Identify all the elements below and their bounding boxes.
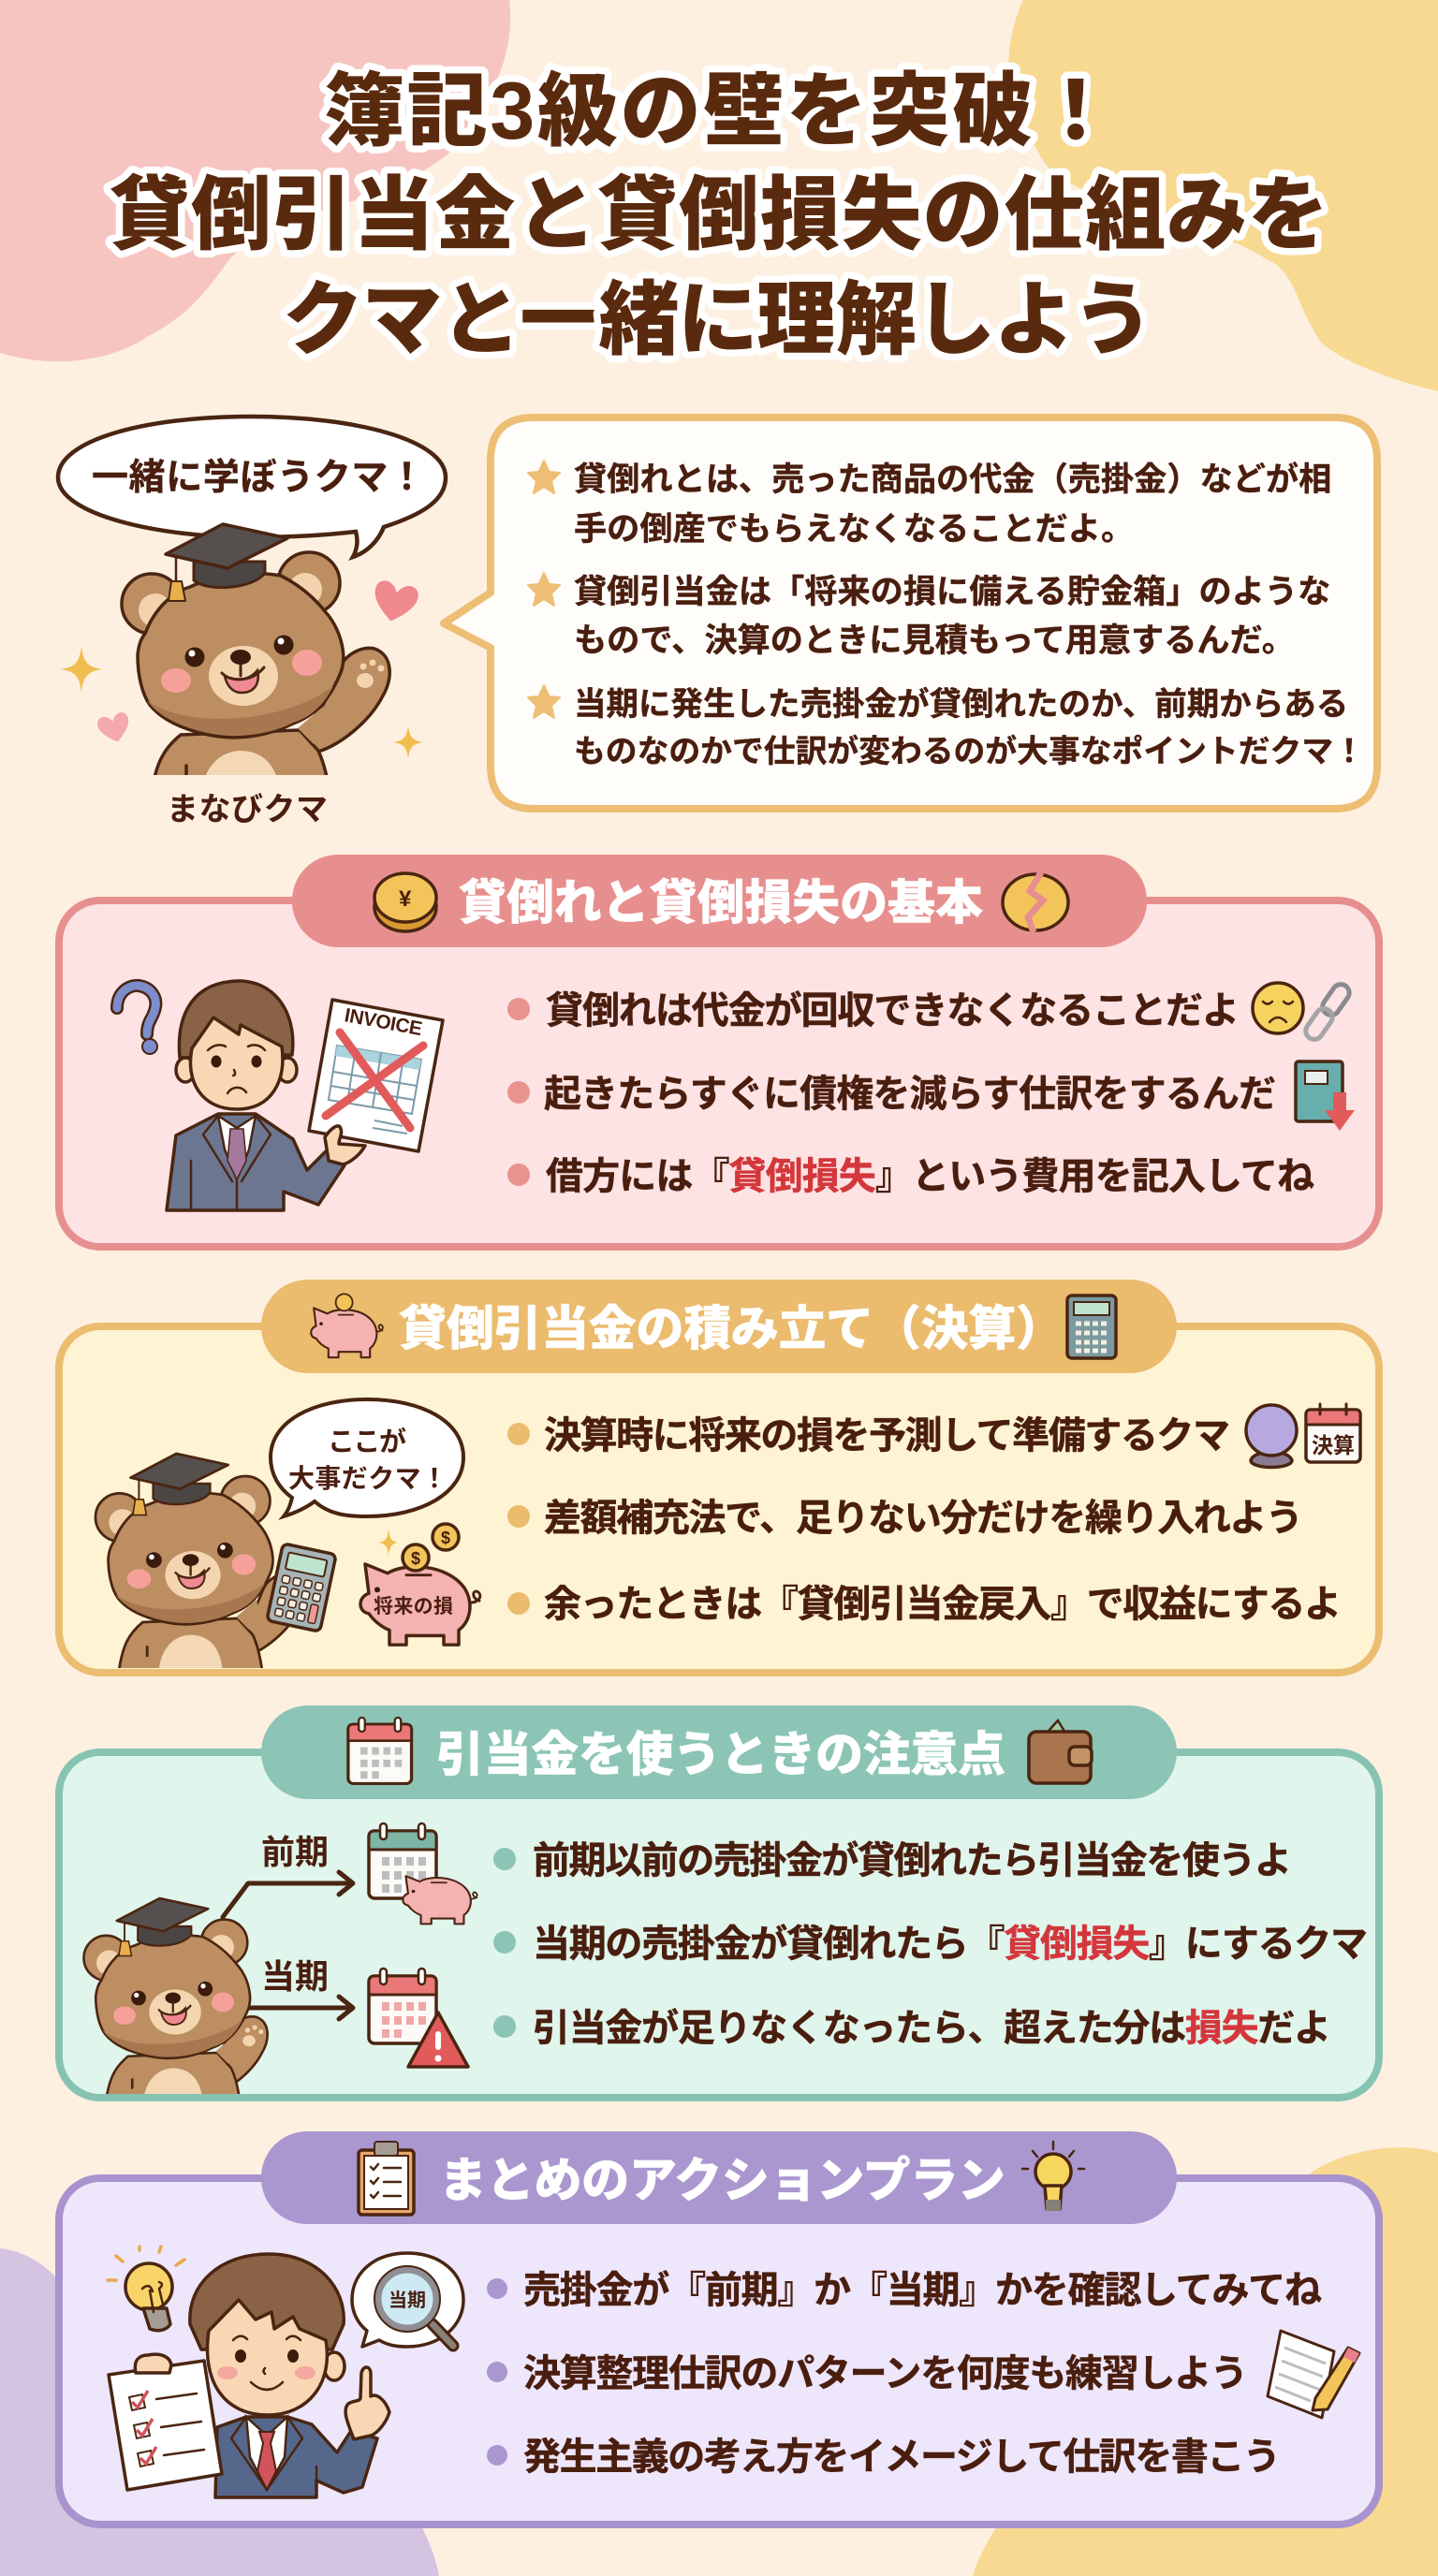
- speech bubble: ここが大事だクマ: [271, 1399, 463, 1516]
- icon: broken chain: [1302, 981, 1353, 1043]
- text: intro 1: 手の倒産でもらえなくなることだよ。: [574, 511, 1134, 548]
- hearts and sparkles: [60, 579, 424, 759]
- mascot name: まなびクマ: [167, 792, 328, 827]
- icon: 決算 calendar: 決算: [1312, 1433, 1355, 1457]
- bear: [95, 1454, 303, 1678]
- header pill: [261, 2131, 1177, 2224]
- man with invoice: [117, 981, 443, 1210]
- icon: ledger with down arrow: [1296, 1061, 1355, 1131]
- checklist: [109, 2354, 222, 2490]
- heading: まとめのアクションプラン: [439, 2154, 1005, 2207]
- label: 前期: 前期: [261, 1833, 329, 1871]
- icon: sad face: [1253, 983, 1303, 1033]
- bullet points: [493, 1840, 1368, 2049]
- bullet points: 決算時に将来の損を予測して準備するクマ: [544, 1415, 1230, 1456]
- speech bubble: 一緒に学ぼうクマ！: [92, 458, 425, 498]
- hand pointing: [345, 2367, 389, 2439]
- bullet points: 当期の売掛金が貸倒れたら『貸倒損失』にするクマ: [533, 1924, 1368, 1965]
- bullet points: 前期以前の売掛金が貸倒れたら引当金を使うよ: [533, 1840, 1292, 1881]
- piggy bank: 将来の損: [360, 1524, 480, 1645]
- text: intro 2: 貸倒引当金は「将来の損に備える貯金箱」のような: [574, 574, 1330, 610]
- title: [110, 66, 1328, 365]
- bullet points: 差額補充法で、足りない分だけを繰り入れよう: [544, 1498, 1303, 1539]
- icon: broken coin: [1003, 872, 1068, 932]
- icon: notebook and pencil: [1268, 2331, 1359, 2418]
- piggy bank: 将来の損: 将来の損: [374, 1596, 453, 1617]
- bullet points: 引当金が足りなくなったら、超えた分は損失だよ: [533, 2008, 1331, 2049]
- bear: [122, 524, 389, 805]
- suit: [215, 2417, 377, 2497]
- panel: intro speech bubble: [444, 417, 1377, 809]
- background blob: yellow top: [1008, 0, 1438, 391]
- magnifier bubble: [352, 2253, 463, 2347]
- icon: bulb with rays: [108, 2247, 184, 2331]
- text: intro 3: 当期に発生した売掛金が貸倒れたのか、前期からある: [574, 686, 1348, 723]
- panel: 引当金を使うときの注意点: [59, 1705, 1379, 2109]
- icon: piggy bank: [311, 1294, 383, 1357]
- background blob: purple bottom: [0, 2248, 439, 2576]
- star bullet 3: [528, 685, 560, 718]
- icon: wallet: [1029, 1720, 1092, 1783]
- speech bubble: [58, 417, 446, 557]
- bullet points: [487, 2270, 1322, 2478]
- speech bubble: ここが大事だクマ: 大事だクマ！: [288, 1464, 448, 1493]
- hand: [325, 1126, 365, 1164]
- header pill: [261, 1280, 1177, 1373]
- speech bubble: ここが大事だクマ: ここが: [328, 1426, 406, 1457]
- panel: 貸倒れと貸倒損失の基本: [59, 855, 1379, 1247]
- head: [324, 2352, 345, 2380]
- bullet points: 借方には『貸倒損失』という費用を記入してね: [546, 1156, 1314, 1197]
- invoice sheet: [309, 1000, 443, 1151]
- background blob: pink: [0, 0, 510, 361]
- magnifier bubble: 当期: [389, 2290, 426, 2311]
- icon: calendar with warning: [369, 1969, 468, 2067]
- text: intro 3: ものなのかで仕訳が変わるのが大事なポイントだクマ！: [574, 733, 1365, 769]
- star bullet 1: [528, 461, 560, 493]
- bear: [84, 1898, 268, 2109]
- suit: [167, 1114, 345, 1210]
- icon: crystal ball: [1246, 1405, 1297, 1468]
- piggy bank: 将来の損: $: [441, 1529, 450, 1547]
- bullet points: [507, 990, 1314, 1197]
- panel: まとめのアクションプラン: [59, 2131, 1379, 2525]
- bullet points: 起きたらすぐに債権を減らす仕訳をするんだ: [544, 1074, 1276, 1115]
- heading: 貸倒引当金の積み立て（決算）: [399, 1302, 1064, 1355]
- title: 簿記3級の壁を突破！: [324, 66, 1116, 156]
- star bullet 2: [528, 573, 560, 606]
- invoice sheet: INVOICE: [343, 1004, 424, 1040]
- bullet points: 決算整理仕訳のパターンを何度も練習しよう: [523, 2353, 1248, 2394]
- bullet points: 貸倒れは代金が回収できなくなることだよ: [546, 990, 1240, 1032]
- piggy bank: 将来の損: $: [411, 1549, 420, 1568]
- background blob: yellow bottom: [973, 2147, 1438, 2576]
- icon: light bulb: [1022, 2142, 1084, 2211]
- text: intro 2: もので、決算のときに見積もって用意するんだ。: [574, 622, 1295, 659]
- bullet points: 発生主義の考え方をイメージして仕訳を書こう: [523, 2437, 1281, 2478]
- icon: clipboard: [359, 2142, 414, 2215]
- icon: yen coin: [374, 873, 436, 931]
- panel: 貸倒引当金の積み立て（決算）: [59, 1280, 1379, 1678]
- title: 貸倒引当金と貸倒損失の仕組みを: [110, 170, 1328, 260]
- question mark: [117, 986, 157, 1054]
- heading: 貸倒れと貸倒損失の基本: [459, 876, 983, 929]
- mascot: まなびクマ with speech bubble: [58, 417, 446, 827]
- icon: calculator: [1067, 1295, 1116, 1358]
- icon: calendar with piggy: [369, 1823, 477, 1924]
- bullet points: 余ったときは『貸倒引当金戻入』で収益にするよ: [544, 1584, 1342, 1625]
- arrow: 前期: [223, 1872, 353, 1917]
- head: [179, 981, 293, 1058]
- icon: 決算 calendar: [1306, 1404, 1360, 1462]
- icon: calendar: [348, 1718, 412, 1783]
- icon: yen coin: ¥: [399, 886, 412, 912]
- bullet points: [507, 1415, 1342, 1625]
- bullet points: 売掛金が『前期』か『当期』かを確認してみてね: [523, 2270, 1322, 2311]
- icon: calculator held by bear: [267, 1544, 336, 1632]
- title: クマと一緒に理解しよう: [283, 275, 1153, 365]
- label: 当期: 当期: [261, 1957, 329, 1996]
- header pill: [292, 855, 1147, 947]
- header pill: [261, 1705, 1177, 1799]
- man with checklist: [108, 2247, 463, 2497]
- heading: 引当金を使うときの注意点: [436, 1728, 1005, 1781]
- text: intro 1: 貸倒れとは、売った商品の代金（売掛金）などが相: [574, 461, 1331, 498]
- arrow: 当期: [243, 1997, 353, 2019]
